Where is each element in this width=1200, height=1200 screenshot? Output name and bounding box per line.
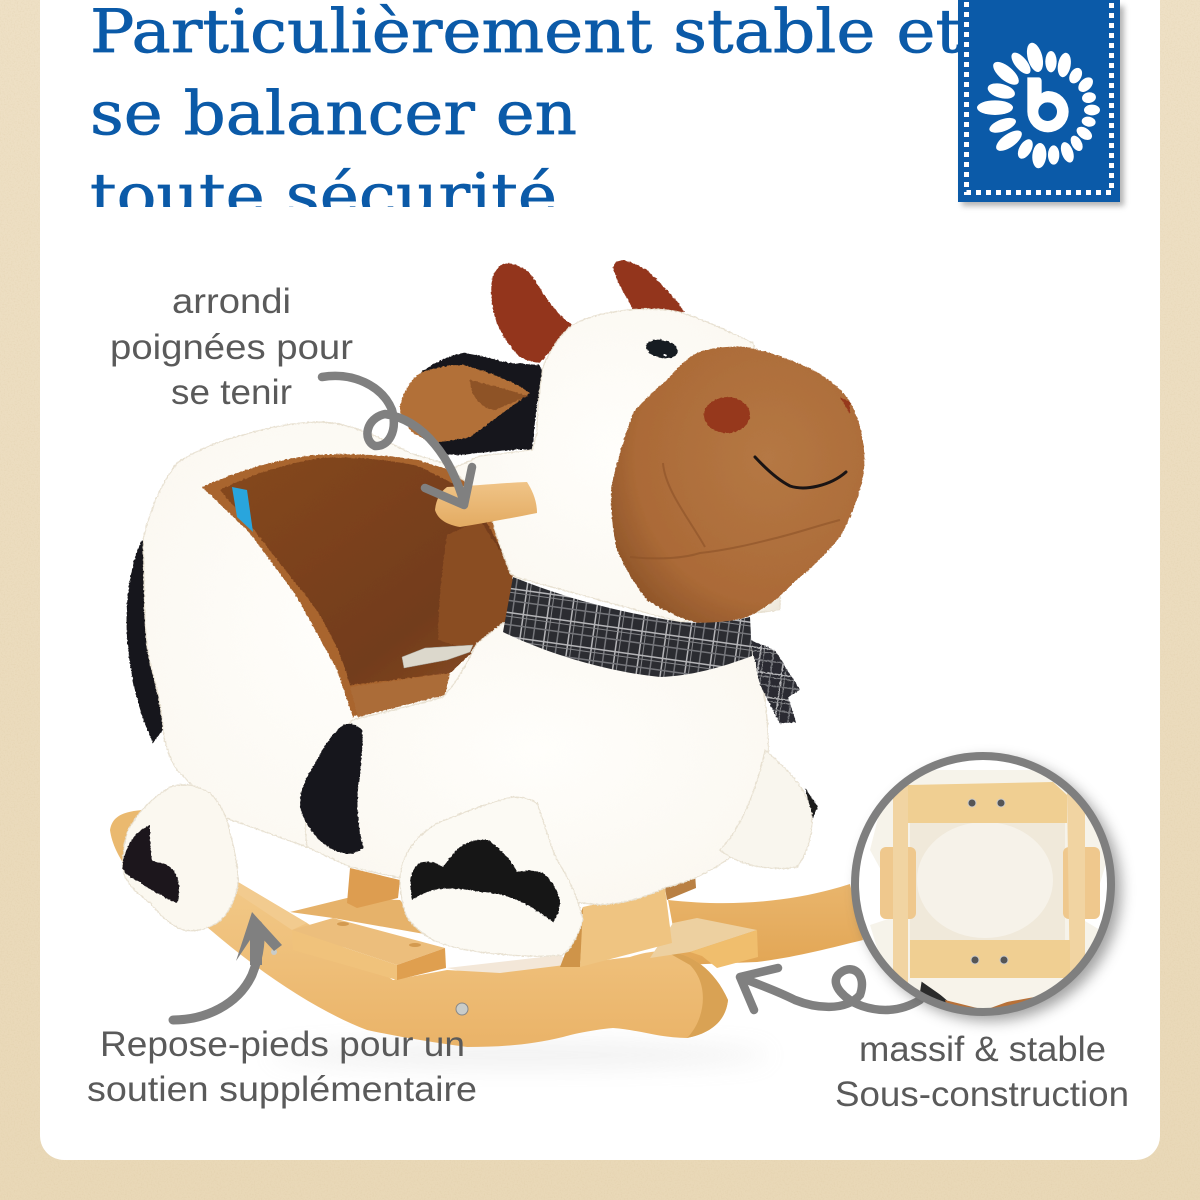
ear inner bbox=[400, 365, 530, 442]
seat floor bbox=[350, 673, 450, 717]
main rocker bbox=[207, 882, 728, 1047]
label: base: Sous-construction bbox=[835, 1075, 1129, 1114]
horns bbox=[491, 263, 572, 363]
seat side wall bbox=[438, 520, 513, 650]
label: handles: arrondi bbox=[172, 282, 291, 321]
logo badge bbox=[958, 0, 1124, 206]
rear rocker bbox=[110, 810, 200, 872]
rear post bbox=[347, 868, 400, 908]
brown muzzle bbox=[611, 347, 864, 623]
label: footrest bbox=[87, 1025, 477, 1109]
arrow: to footrest bbox=[173, 912, 282, 1020]
rocking cow product illustration bbox=[110, 260, 864, 1047]
label: base: massif & stable bbox=[859, 1030, 1106, 1069]
muzzle folds bbox=[630, 463, 840, 558]
arrow: to base bbox=[740, 968, 920, 1010]
front plank bbox=[292, 918, 445, 965]
front hoof bbox=[400, 797, 583, 956]
black side patch bbox=[127, 540, 170, 743]
brown seat interior bbox=[220, 457, 513, 685]
left hoof bbox=[123, 785, 238, 931]
label: footrest: soutien supplémentaire bbox=[87, 1070, 477, 1109]
label: footrest: Repose-pieds pour un bbox=[100, 1025, 465, 1064]
ear black bbox=[420, 353, 544, 455]
seat back bbox=[143, 422, 530, 878]
magnified detail circle bbox=[855, 756, 1121, 1021]
body black spot bbox=[300, 724, 363, 854]
fur shapes bbox=[123, 260, 864, 956]
seam under platform bbox=[447, 955, 575, 978]
label: handles: se tenir bbox=[171, 373, 292, 412]
title: toute sécurité bbox=[90, 161, 557, 231]
label: handles bbox=[110, 282, 353, 412]
rear body bbox=[306, 623, 768, 905]
front post bbox=[560, 907, 583, 967]
ground shadow bbox=[270, 1043, 770, 1067]
eye bbox=[644, 337, 680, 361]
right plank bbox=[650, 918, 757, 958]
nostril bbox=[704, 397, 750, 433]
plaid scarf bbox=[503, 577, 752, 677]
brown seat rim bbox=[202, 454, 513, 717]
smile bbox=[755, 457, 846, 488]
scarf tail bbox=[750, 640, 800, 724]
head bbox=[450, 309, 780, 622]
wooden handle bbox=[435, 482, 537, 527]
arrow: to handle bbox=[322, 376, 472, 505]
seat tag bbox=[232, 487, 253, 532]
seat strap buckle bbox=[402, 645, 473, 668]
wooden rocker base bbox=[110, 810, 863, 1047]
title: se balancer en bbox=[90, 79, 577, 149]
title bbox=[92, 4, 958, 207]
rear plank bbox=[290, 898, 430, 935]
logo flower mark bbox=[977, 41, 1100, 169]
label: base bbox=[835, 1030, 1129, 1114]
label: handles: poignées pour bbox=[110, 328, 353, 367]
rear right leg bbox=[720, 750, 812, 868]
